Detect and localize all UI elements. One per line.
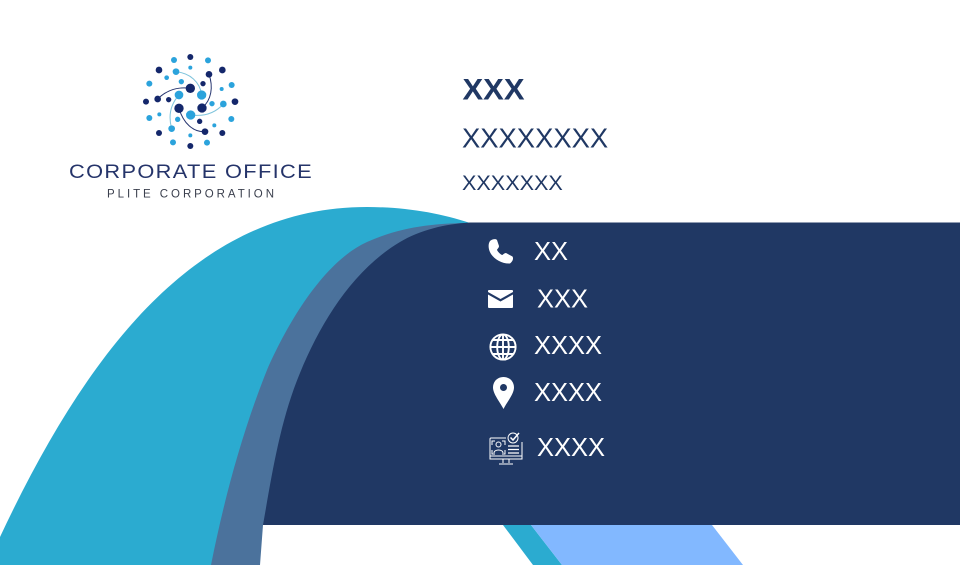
subheading: job title: XXXXXXXX [462,122,608,153]
address: XXXX [534,379,602,407]
website: XXXX [534,332,602,360]
bottom stripe: light blue [531,525,743,565]
bottom stripe: teal [503,525,562,565]
icon: phone [489,239,513,264]
phone number: XX [534,238,568,266]
logo [69,54,313,200]
logo title: CORPORATE OFFICE [69,161,313,183]
subheading: department: XXXXXXX [462,170,563,195]
logo subtitle: PLITE CORPORATION [107,188,274,200]
online profile: XXXX [537,434,605,462]
icon: globe [490,334,516,360]
logo emblem: dots and curves [143,54,238,149]
icon: map pin [493,377,514,409]
navy contact panel [263,222,960,525]
icon: envelope [488,290,513,308]
teal swoosh [0,207,470,565]
steel blue swoosh [211,223,470,565]
heading: name: XXX [462,74,525,106]
email: XXX [537,286,588,314]
icon: monitor with profile and check badge [490,433,522,464]
